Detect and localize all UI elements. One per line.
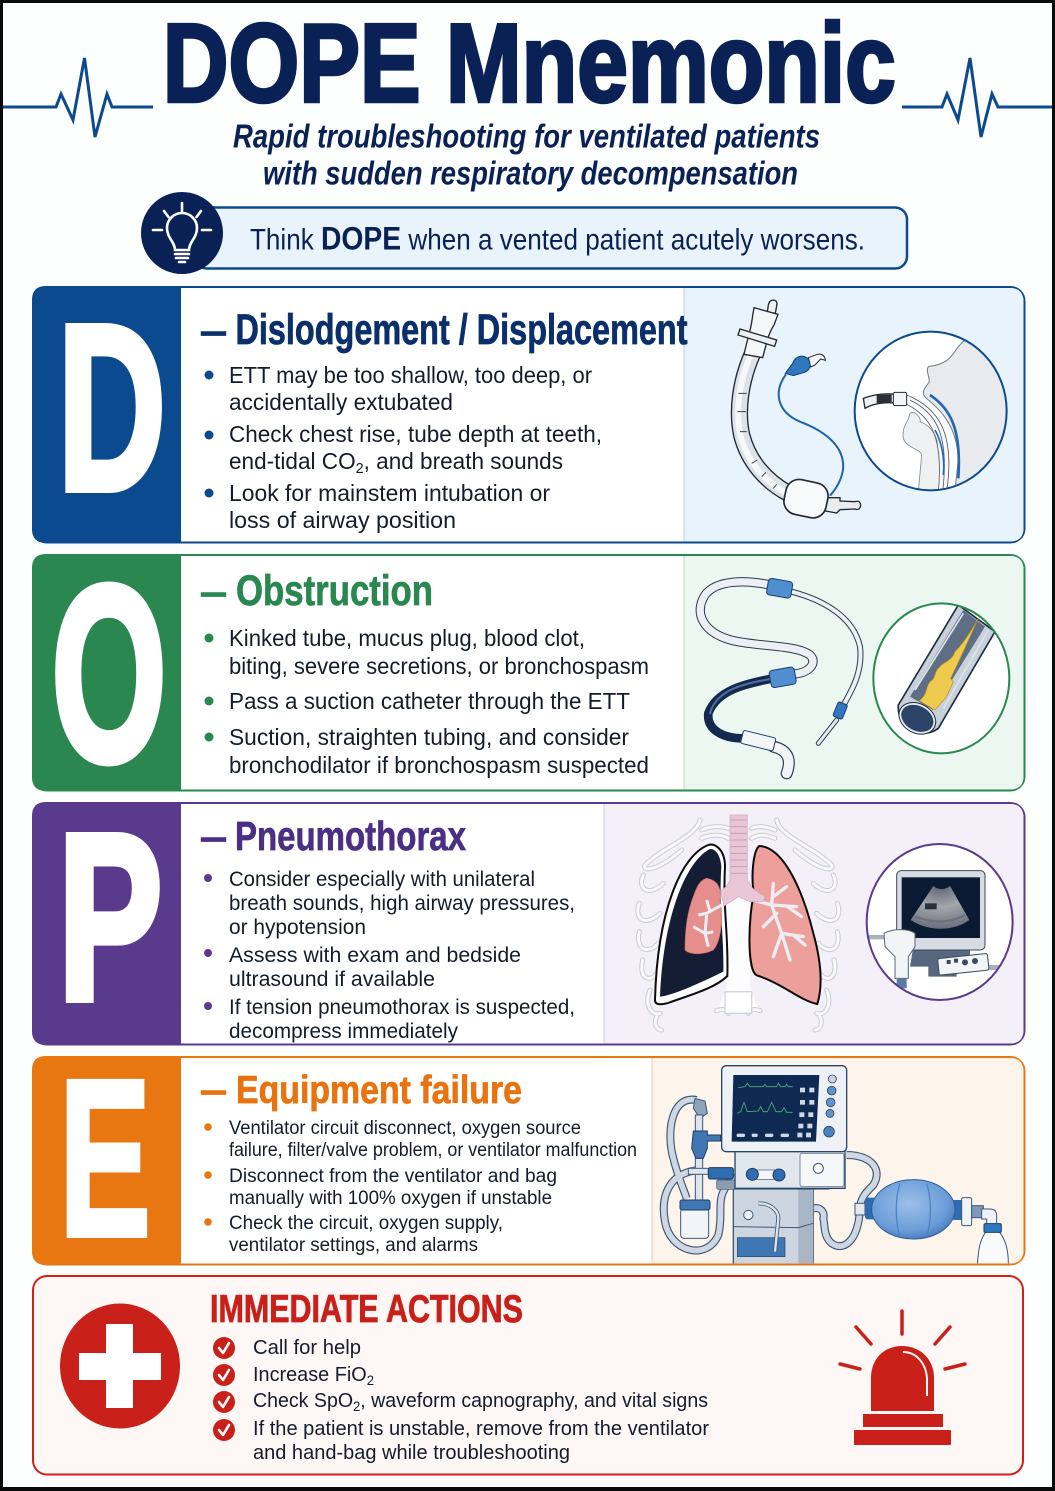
- connector: [738, 300, 778, 358]
- bullet list: 2: [356, 460, 364, 477]
- icon: right heartbeat line: [902, 58, 1052, 137]
- cuff: [781, 477, 861, 520]
- ventilator body: [717, 1151, 845, 1189]
- icon: left heartbeat line: [3, 58, 153, 137]
- icon: alarm siren: [840, 1311, 965, 1445]
- checklist: 2: [353, 1399, 360, 1414]
- callout: think DOPE: [141, 192, 907, 274]
- bullet list: Check the circuit, oxygen supply,: [229, 1213, 503, 1234]
- callout: think DOPE: Think DOPE when a vented patient acutely worsens.: [250, 220, 865, 256]
- bullet list: breath sounds, high airway pressures,: [229, 891, 575, 915]
- subtitle: Rapid troubleshooting for ventilated patients: [233, 118, 820, 154]
- icon: medical cross: [60, 1304, 180, 1428]
- pilot line: [779, 354, 843, 496]
- bullet list: Check chest rise, tube depth at teeth,: [229, 421, 602, 447]
- panel: P Pneumothorax: [32, 785, 1024, 1050]
- bullet list: Kinked tube, mucus plug, blood clot,: [229, 625, 585, 651]
- illustration: lungs with pneumothorax: [638, 815, 1013, 1030]
- bullet list: biting, severe secretions, or bronchospasm: [229, 653, 649, 679]
- bullet list: accidentally extubated: [229, 389, 453, 415]
- checklist: Check SpO: [253, 1389, 358, 1412]
- bullet list: loss of airway position: [229, 507, 456, 533]
- bullet list: or hypotension: [229, 915, 366, 939]
- bullet list: Pass a suction catheter through the ETT: [229, 688, 630, 714]
- airway inset: [855, 332, 1013, 492]
- bullet list: If tension pneumothorax is suspected,: [229, 995, 575, 1019]
- bullet list: ETT may be too shallow, too deep, or: [229, 362, 592, 388]
- checklist: Increase FiO: [253, 1363, 370, 1386]
- bullet list: failure, filter/valve problem, or ventilator malfunction: [229, 1140, 637, 1161]
- heading: —: [201, 1068, 226, 1112]
- cart stand: [733, 1188, 813, 1264]
- heading: IMMEDIATE ACTIONS: [210, 1288, 523, 1331]
- icon: lightbulb: [141, 192, 223, 274]
- letter block D: [32, 276, 181, 543]
- checklist: [213, 1336, 709, 1464]
- letter block D: D: [58, 276, 166, 540]
- bullet list: [204, 362, 602, 533]
- bullet list: [204, 867, 575, 1043]
- checklist: Call for help: [253, 1336, 361, 1359]
- mucus plug inset: [873, 603, 1009, 753]
- bullet list: Disconnect from the ventilator and bag: [229, 1166, 557, 1187]
- subtitle: [233, 118, 820, 192]
- bullet list: decompress immediately: [229, 1019, 458, 1043]
- tube: [737, 353, 788, 493]
- checklist: and hand-bag while troubleshooting: [253, 1441, 570, 1464]
- trachea: [721, 815, 765, 906]
- heading: Dislodgement / Displacement: [236, 306, 688, 354]
- checklist: If the patient is unstable, remove from the ventilator: [253, 1417, 709, 1440]
- tee valve and humidifier jar: [680, 1098, 733, 1238]
- bullet list: end-tidal CO: [229, 448, 361, 474]
- bullet list: Ventilator circuit disconnect, oxygen source: [229, 1118, 581, 1139]
- panel: E Equipment failure: [32, 1056, 1026, 1266]
- bullet list: ultrasound if available: [229, 967, 435, 991]
- letter block E: [32, 1034, 181, 1284]
- connectors: [740, 578, 848, 751]
- letter block P: [32, 785, 181, 1050]
- subtitle: with sudden respiratory decompensation: [263, 154, 798, 192]
- letter block E: E: [59, 1034, 151, 1284]
- title: DOPE Mnemonic: [163, 1, 896, 125]
- heading: —: [201, 570, 226, 614]
- monitor: [722, 1066, 847, 1152]
- rib cage: [638, 820, 839, 1030]
- catheter: [700, 582, 861, 773]
- heading: Equipment failure: [236, 1069, 522, 1112]
- panel: D Dislodgement: [32, 276, 1024, 543]
- bullet list: Consider especially with unilateral: [229, 867, 535, 891]
- letter block O: [32, 534, 181, 813]
- collapsed left lung cavity: [655, 844, 728, 1004]
- panel: O Obstruction: [32, 554, 1026, 792]
- bullet list: manually with 100% oxygen if unstable: [229, 1188, 552, 1209]
- letter block P: P: [58, 785, 162, 1050]
- bullet list: Assess with exam and bedside: [229, 943, 521, 967]
- resuscitation bag: [855, 1180, 1008, 1264]
- heading: Pneumothorax: [235, 813, 466, 859]
- bullet list: ventilator settings, and alarms: [229, 1235, 478, 1256]
- letter block O: O: [52, 534, 166, 813]
- heading: —: [201, 815, 226, 859]
- illustration: ventilator and bag valve mask: [664, 1066, 1008, 1264]
- heading: Obstruction: [236, 567, 433, 615]
- bullet list: [204, 1118, 637, 1256]
- checklist: , waveform capnography, and vital signs: [360, 1389, 708, 1412]
- breathing tubes: [664, 1100, 877, 1250]
- ultrasound inset: [867, 844, 1013, 1000]
- right lung: [749, 846, 821, 1004]
- bullet list: [204, 625, 649, 778]
- bullet list: bronchodilator if bronchospasm suspected: [229, 752, 649, 778]
- checklist: 2: [367, 1373, 374, 1388]
- heading: —: [201, 309, 226, 353]
- illustration: endotracheal tube and airway: [737, 300, 1013, 520]
- bullet list: Suction, straighten tubing, and consider: [229, 724, 629, 750]
- bullet list: Look for mainstem intubation or: [229, 480, 550, 506]
- illustration: suction catheter and mucus plug: [700, 578, 1009, 773]
- bullet list: , and breath sounds: [364, 448, 563, 474]
- panel: immediate actions: [33, 1276, 1023, 1474]
